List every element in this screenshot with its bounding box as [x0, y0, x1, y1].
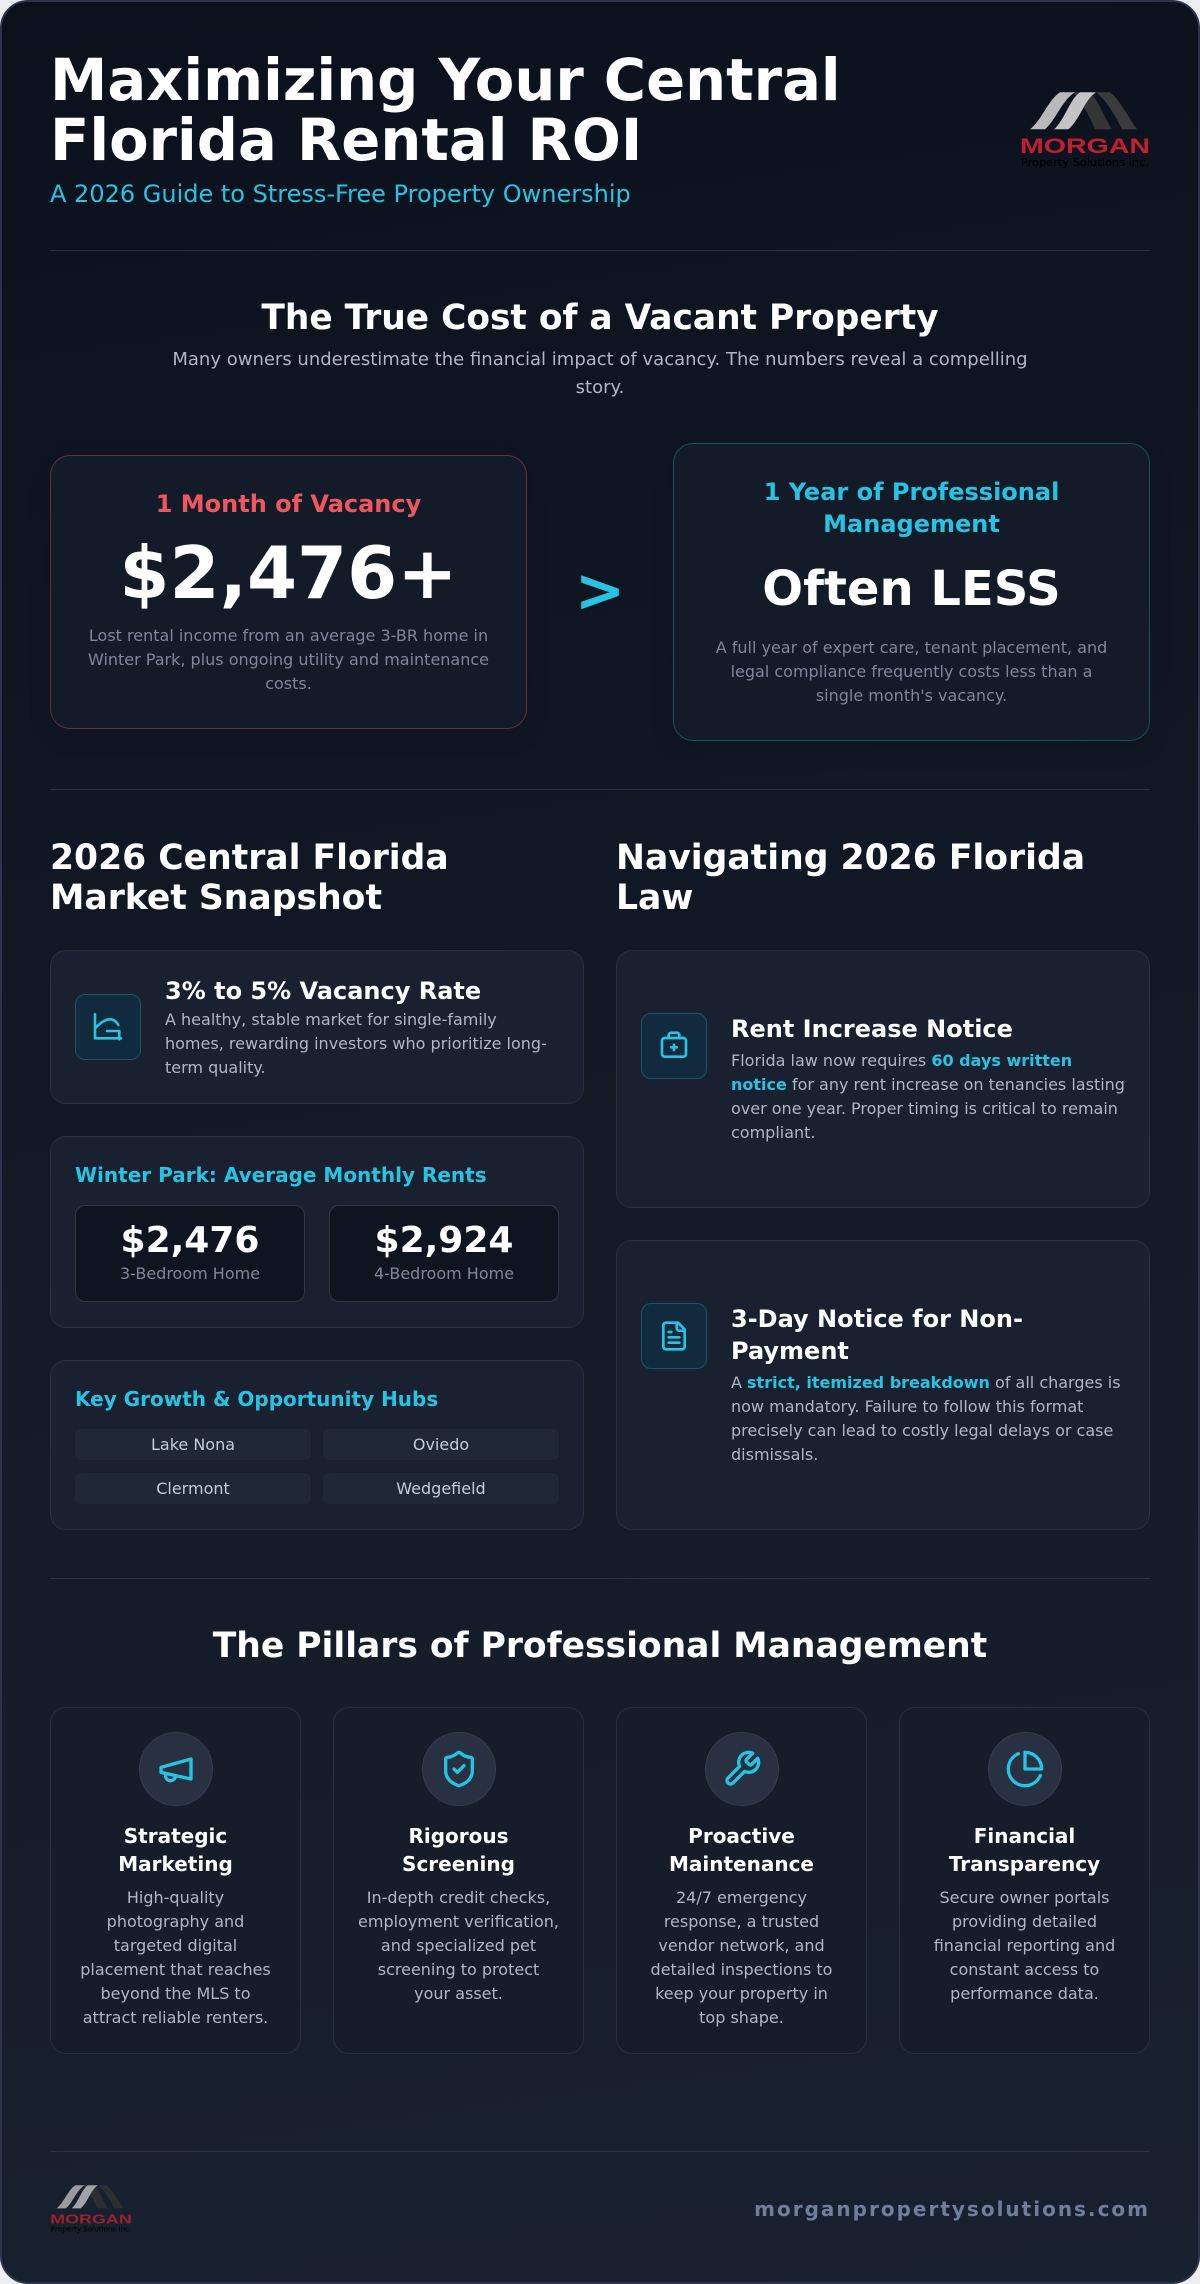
3-day notice text: precisely can lead to costly legal delays or case: [731, 1421, 1113, 1440]
icon: wrench: [705, 1732, 779, 1806]
panel: rent increase notice: [616, 950, 1150, 1208]
proactive maintenance text: keep your property in: [655, 1984, 828, 2003]
3-bedroom value: $2,476: [121, 1220, 259, 1261]
vacancy card description: Winter Park, plus ongoing utility and maintenance: [88, 650, 489, 668]
section heading: true cost of vacancy: The True Cost of a Vacant Property: [261, 298, 939, 338]
strategic marketing text: photography and: [107, 1912, 244, 1931]
proactive maintenance text: 24/7 emergency: [676, 1888, 807, 1907]
management card description: [716, 638, 1107, 704]
title: Florida Rental ROI: [50, 107, 642, 174]
rigorous screening text: [358, 1888, 559, 2003]
hub: Oviedo: Oviedo: [413, 1435, 469, 1454]
strategic marketing heading: Strategic: [124, 1824, 227, 1848]
management card heading: [764, 478, 1059, 538]
proactive maintenance text: vendor network, and: [658, 1936, 825, 1955]
panel: proactive maintenance: [616, 1707, 867, 2054]
3-day notice text: [731, 1373, 1121, 1464]
rent increase text: [731, 1051, 1125, 1142]
icon: briefcase medical: [641, 1013, 707, 1079]
hub: Lake Nona: [75, 1429, 311, 1460]
proactive maintenance text: detailed inspections to: [651, 1960, 832, 1979]
vacancy rate text: term quality.: [165, 1058, 266, 1077]
section intro text: Many owners underestimate the financial impact of vacancy. The numbers reveal a compelling: [172, 349, 1028, 370]
section intro text: story.: [576, 377, 624, 398]
strategic marketing heading: Marketing: [118, 1852, 233, 1876]
icon: document: [641, 1303, 707, 1369]
vacancy rate text: [165, 1010, 547, 1077]
icon: shield check: [422, 1732, 496, 1806]
rigorous screening heading: Screening: [402, 1852, 515, 1876]
4-bedroom label: 4-Bedroom Home: [374, 1264, 514, 1282]
vacancy card description: costs.: [265, 674, 312, 692]
title: [50, 47, 841, 174]
management card heading: Management: [823, 510, 1000, 538]
rent tile: 3-bedroom: [75, 1205, 305, 1302]
financial transparency heading: Financial: [974, 1824, 1075, 1848]
hub: Oviedo: [323, 1429, 559, 1460]
3-day notice text: A strict, itemized breakdown of all charges is: [731, 1373, 1121, 1392]
vacancy cost figure: $2,476+: [119, 531, 458, 615]
proactive maintenance heading: Proactive: [688, 1824, 795, 1848]
rigorous screening text: screening to protect: [378, 1960, 539, 1979]
proactive maintenance heading: [669, 1824, 814, 1876]
financial transparency heading: Transparency: [949, 1852, 1100, 1876]
icon: chart: [75, 994, 141, 1060]
3-day notice heading: 3-Day Notice for Non-: [731, 1304, 1023, 1332]
vacancy card description: Lost rental income from an average 3-BR home in: [89, 626, 488, 644]
hub: Wedgefield: Wedgefield: [396, 1479, 486, 1498]
financial transparency text: performance data.: [950, 1984, 1099, 2003]
arrow: greater than comparison: >: [575, 556, 625, 626]
vacancy card heading: 1 Month of Vacancy: [156, 490, 421, 518]
strategic marketing text: placement that reaches: [80, 1960, 271, 1979]
vacancy rate text: homes, rewarding investors who prioritize long-: [165, 1034, 547, 1053]
heading: Florida law: Law: [616, 878, 693, 918]
rent increase text: over one year. Proper timing is critical to remain: [731, 1099, 1118, 1118]
icon: pie chart: [988, 1732, 1062, 1806]
heading: market snapshot: [50, 838, 449, 918]
3-day notice text: dismissals.: [731, 1445, 818, 1464]
rigorous screening heading: [402, 1824, 515, 1876]
heading: Florida law: [616, 838, 1085, 918]
vacancy rate heading: 3% to 5% Vacancy Rate: [165, 977, 481, 1005]
strategic marketing text: beyond the MLS to: [100, 1984, 250, 2003]
financial transparency heading: [948, 1824, 1100, 1876]
logo: Morgan Property Solutions header: Property Solutions Inc.: [1021, 157, 1149, 169]
heading: market snapshot: Market Snapshot: [50, 878, 382, 918]
management card description: A full year of expert care, tenant placement, and: [716, 638, 1107, 656]
panel: strategic marketing: [50, 1707, 301, 2054]
rent increase text: Florida law now requires 60 days written: [731, 1051, 1072, 1070]
rent increase heading: Rent Increase Notice: [731, 1014, 1013, 1042]
footer website: morganpropertysolutions.com: [754, 2197, 1150, 2221]
4-bedroom value: $2,924: [375, 1220, 513, 1261]
3-day notice heading: Payment: [731, 1336, 849, 1364]
logo: Morgan Property Solutions header: [1020, 92, 1150, 169]
panel: financial transparency: [899, 1707, 1150, 2054]
proactive maintenance text: response, a trusted: [664, 1912, 819, 1931]
title: Maximizing Your Central: [50, 47, 841, 114]
management card heading: 1 Year of Professional: [764, 478, 1059, 506]
financial transparency text: Secure owner portals: [940, 1888, 1110, 1907]
vacancy rate text: A healthy, stable market for single-family: [165, 1010, 497, 1029]
logo: Morgan Property Solutions footer: Property Solutions Inc.: [51, 2225, 131, 2233]
panel: 1 month of vacancy: [50, 455, 527, 729]
hub: Clermont: [75, 1473, 311, 1504]
heading: Florida law: Navigating 2026 Florida: [616, 838, 1085, 878]
financial transparency text: [934, 1888, 1115, 2003]
hub: Lake Nona: Lake Nona: [151, 1435, 235, 1454]
heading: market snapshot: 2026 Central Florida: [50, 838, 449, 878]
proactive maintenance text: [651, 1888, 832, 2027]
proactive maintenance heading: Maintenance: [669, 1852, 814, 1876]
rigorous screening text: employment verification,: [358, 1912, 559, 1931]
strategic marketing text: High-quality: [127, 1888, 224, 1907]
icon: megaphone: [139, 1732, 213, 1806]
hubs heading: Key Growth & Opportunity Hubs: [75, 1387, 438, 1411]
rent tile: 4-bedroom: [329, 1205, 559, 1302]
strategic marketing text: targeted digital: [114, 1936, 237, 1955]
3-day notice text: now mandatory. Failure to follow this format: [731, 1397, 1083, 1416]
financial transparency text: financial reporting and: [934, 1936, 1115, 1955]
management card description: single month's vacancy.: [816, 686, 1007, 704]
hub: Wedgefield: [323, 1473, 559, 1504]
rent increase text: compliant.: [731, 1123, 816, 1142]
section heading: pillars: The Pillars of Professional Management: [213, 1626, 987, 1666]
rent increase text: notice for any rent increase on tenancies lasting: [731, 1075, 1125, 1094]
logo: Morgan Property Solutions footer: [50, 2185, 132, 2234]
panel: vacancy rate: [50, 950, 584, 1104]
panel: Winter Park rents: [50, 1136, 584, 1328]
logo: Morgan Property Solutions header: MORGAN: [1020, 135, 1150, 158]
panel: growth hubs: [50, 1360, 584, 1530]
rigorous screening text: In-depth credit checks,: [367, 1888, 550, 1907]
vacancy card description: [88, 626, 489, 692]
panel: 3-day notice: [616, 1240, 1150, 1530]
panel: rigorous screening: [333, 1707, 584, 2054]
rigorous screening heading: Rigorous: [408, 1824, 509, 1848]
subtitle: A 2026 Guide to Stress-Free Property Ownership: [50, 180, 631, 208]
financial transparency text: providing detailed: [952, 1912, 1097, 1931]
Winter Park heading: Winter Park: Average Monthly Rents: [75, 1163, 487, 1187]
rigorous screening text: your asset.: [414, 1984, 503, 2003]
management card figure: Often LESS: [762, 561, 1061, 617]
proactive maintenance text: top shape.: [699, 2008, 784, 2027]
panel: 1 year of professional management: [673, 443, 1150, 741]
3-bedroom label: 3-Bedroom Home: [120, 1264, 260, 1282]
management card description: legal compliance frequently costs less than a: [731, 662, 1092, 680]
hub: Clermont: Clermont: [156, 1479, 230, 1498]
logo: Morgan Property Solutions footer: MORGAN: [50, 2211, 132, 2226]
strategic marketing text: [80, 1888, 271, 2027]
strategic marketing text: attract reliable renters.: [83, 2008, 268, 2027]
section intro text: [172, 349, 1028, 398]
financial transparency text: constant access to: [950, 1960, 1099, 1979]
strategic marketing heading: [118, 1824, 233, 1876]
3-day notice heading: [731, 1304, 1023, 1364]
rigorous screening text: and specialized pet: [381, 1936, 536, 1955]
